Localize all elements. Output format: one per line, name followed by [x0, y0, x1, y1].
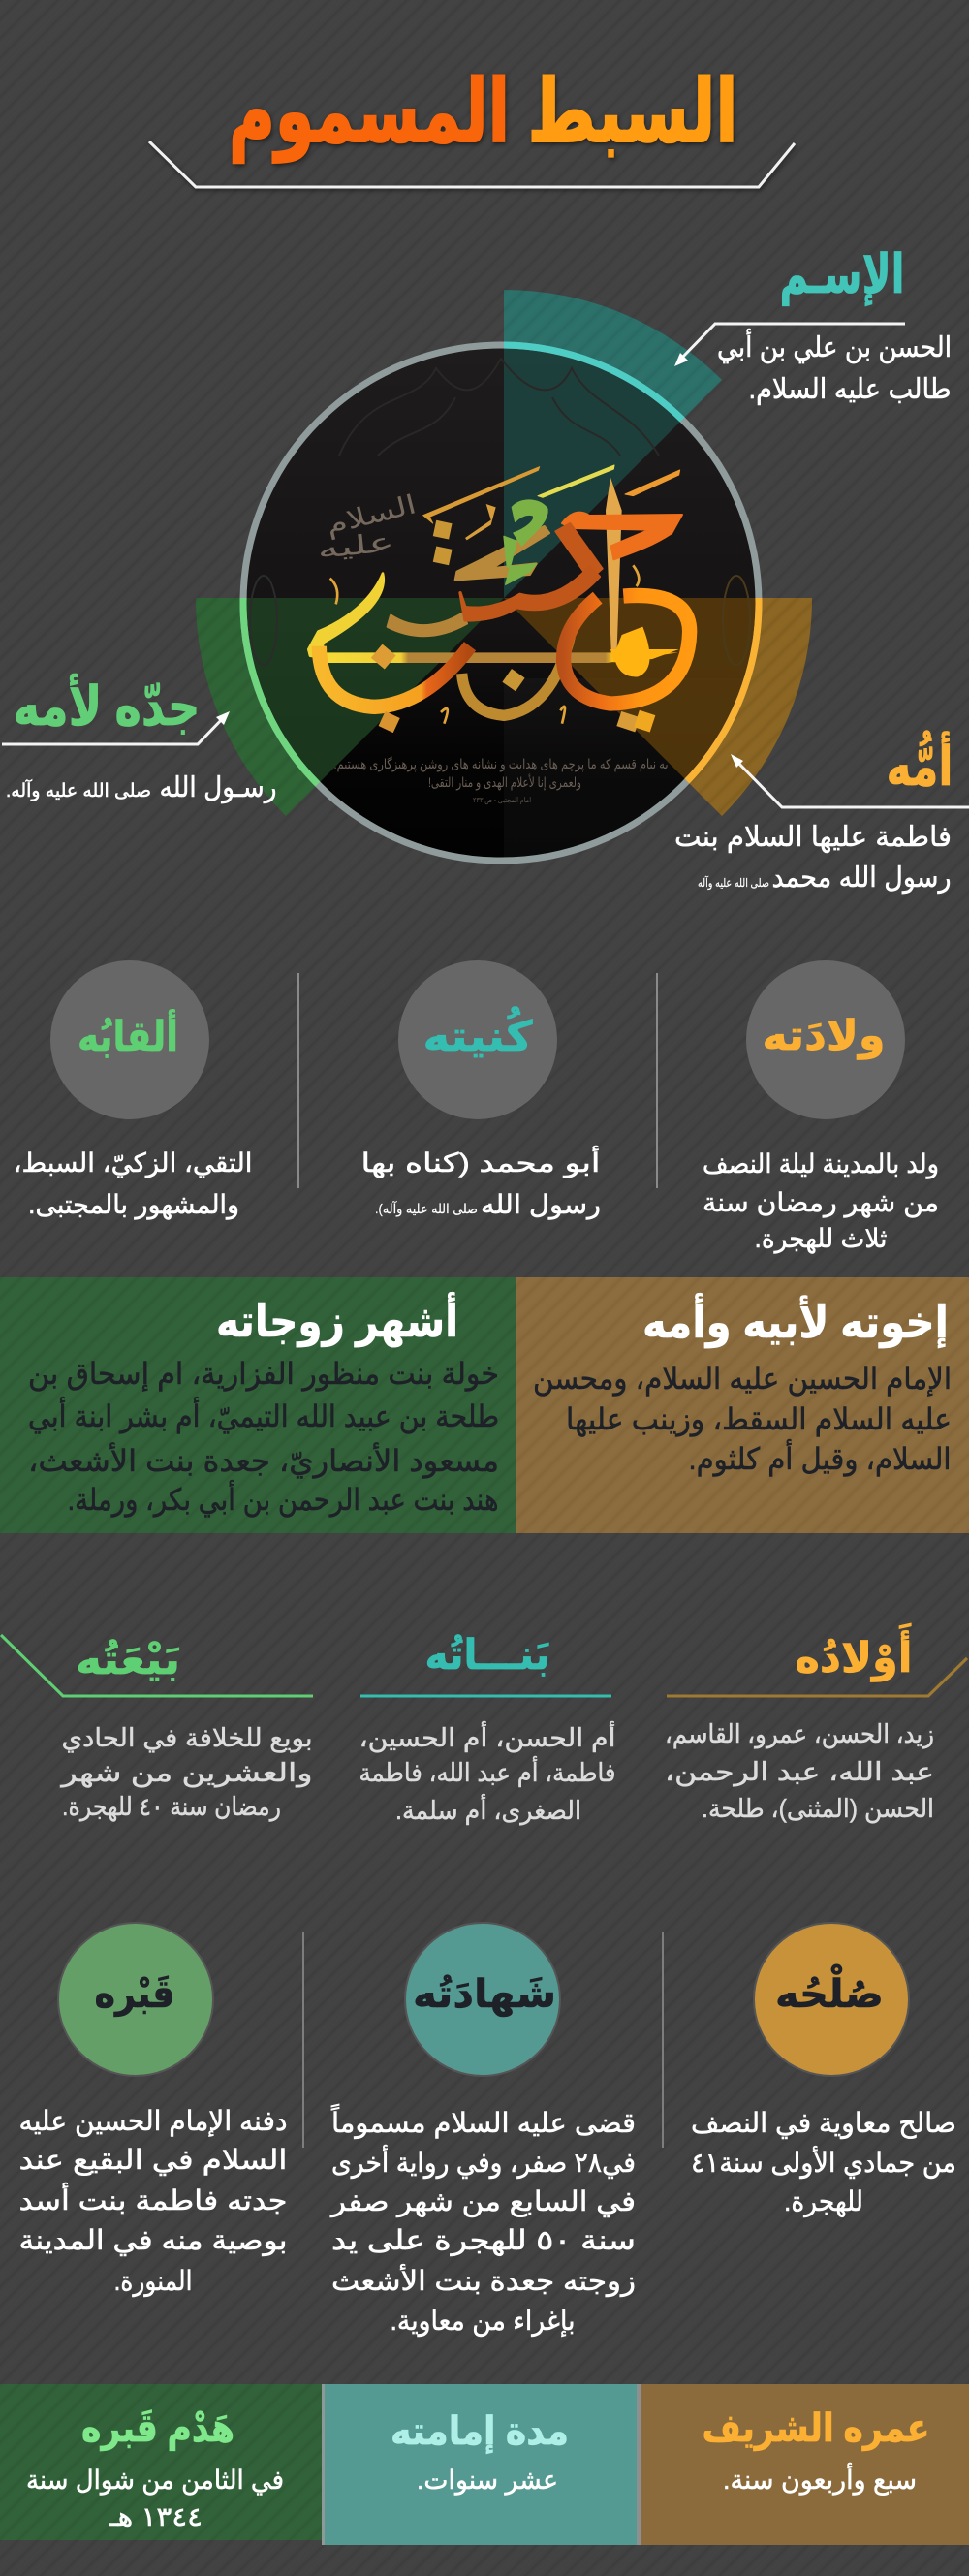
body [533, 1362, 952, 1477]
disc lower inscription [333, 756, 669, 804]
heading: أمُّه [886, 731, 953, 797]
calligraphy: حسن مجتبى [308, 465, 690, 733]
ring green arc [240, 598, 320, 787]
calligraphy small inscription [316, 489, 420, 564]
disc lower inscription: به نیام قسم که ما پرچم های هدایت و نشانه های روشن پرهیزگاری هستیم. [333, 756, 669, 772]
body: في الثامن من شوال سنة [26, 2466, 284, 2496]
panel: siblings [516, 1277, 969, 1533]
disc lower inscription: ولعمری إنا لأعلام الهدى و منار التقى! [428, 773, 581, 791]
titles column [14, 960, 252, 1220]
body: دفنه الإمام الحسين عليه [19, 2106, 287, 2137]
heading: جدّه لأمه [14, 673, 200, 737]
body: التقي، الزكيّ، السبط، [14, 1148, 252, 1178]
body: فاطمة عليها السلام بنت [674, 822, 952, 853]
bracket [1, 1635, 313, 1696]
body: والمشهور بالمجتبى. [28, 1190, 239, 1220]
body: أبو محمد (كناه بها [360, 1145, 601, 1178]
body: ١٣٤٤ هـ [109, 2502, 203, 2531]
body: عبد الله، عبد الرحمن، [665, 1757, 934, 1787]
ring teal arc [504, 341, 684, 423]
green sector [196, 598, 504, 816]
body: أم الحسن، أم الحسين، [359, 1720, 616, 1753]
bracket [667, 1658, 967, 1696]
callout: maternal grandfather [2, 673, 277, 803]
children column [665, 1622, 967, 1824]
body: في السابع من شهر صفر [329, 2186, 636, 2217]
body: السلام في البقيع عند [19, 2145, 287, 2176]
body: الحسن (المثنى)، طلحة. [702, 1794, 934, 1824]
bracket [360, 1694, 611, 1698]
title [229, 64, 738, 163]
body: بوصية منه في المدينة [19, 2225, 287, 2256]
arrow [2, 711, 230, 744]
heading: مدة إمامته [391, 2410, 569, 2454]
body: الصغرى، أم سلمة. [395, 1793, 581, 1826]
body [359, 1720, 616, 1826]
heading: ألقابُه [78, 1009, 178, 1060]
daughters column [359, 1632, 616, 1826]
grey circle [398, 960, 557, 1119]
info row: children, daughters, allegiance [1, 1622, 967, 1826]
body [28, 1357, 499, 1518]
birth column [703, 960, 939, 1254]
disc tints [196, 290, 812, 872]
body: خولة بنت منظور الفزارية، ام إسحاق بن [28, 1357, 499, 1392]
body: صلى الله عليه وآله). [375, 1201, 478, 1217]
body: في٢٨ صفر، وفي رواية أخرى [331, 2144, 636, 2179]
body [703, 1149, 939, 1254]
body: رسول الله محمد [771, 863, 952, 894]
body: جدته فاطمة بنت أسد [19, 2182, 287, 2215]
heading: بَنـــاتُه [424, 1632, 550, 1679]
divider [656, 973, 658, 1188]
body: طلحة بن عبيد الله التيميّ، أم بشر ابنة أبي [28, 1397, 499, 1434]
disc lower inscription: امام المجتبى - ص ٢٣٣ [473, 796, 531, 804]
body: الإمام الحسين عليه السلام، ومحسن [533, 1362, 952, 1397]
info row: birth, kunya, titles [14, 960, 939, 1254]
heading: أَوْلادُه [795, 1622, 913, 1682]
callout: mother [674, 731, 969, 894]
portrait medallion [196, 290, 812, 872]
body [14, 1148, 252, 1220]
heading: أشهر زوجاته [216, 1292, 458, 1347]
title word: orange: السبط [527, 64, 738, 161]
body [360, 1145, 601, 1220]
body: بإغراء من معاوية. [390, 2306, 576, 2337]
body [674, 822, 952, 894]
medallion ring [243, 345, 759, 861]
body: رسـول الله [159, 772, 277, 803]
body: سبع وأربعون سنة. [723, 2462, 917, 2496]
body [26, 2466, 284, 2531]
body: قضى عليه السلام مسموماً [331, 2103, 636, 2139]
body: المنورة. [114, 2266, 192, 2297]
arrow [731, 754, 969, 807]
callout: name [674, 243, 952, 405]
panel: imamate duration [322, 2384, 637, 2545]
body [691, 2108, 956, 2217]
calligraphy small inscription: عليه [316, 527, 395, 564]
body: زوجته جعدة بنت الأشعث [331, 2263, 636, 2297]
body [717, 328, 952, 405]
body [665, 1719, 934, 1824]
grave column [19, 1923, 287, 2297]
body [6, 772, 277, 803]
martyrdom column [329, 1923, 636, 2337]
heading: هَدْم قَبره [81, 2407, 234, 2451]
heading: عمره الشريف [702, 2407, 930, 2451]
sector stripes [196, 290, 812, 816]
heading: ولادَته [762, 1013, 886, 1060]
body: للهجرة. [784, 2186, 863, 2217]
body: من شهر رمضان سنة [703, 1188, 939, 1218]
body: مسعود الأنصاريّ، جعدة بنت الأشعث، [28, 1442, 499, 1479]
body: والعشرين من شهر [59, 1758, 313, 1788]
body: ثلاث للهجرة. [754, 1224, 888, 1254]
body: رمضان سنة ٤٠ للهجرة. [62, 1792, 281, 1822]
peace column [691, 1923, 956, 2217]
body: رسول الله [481, 1190, 601, 1220]
grey circle [50, 960, 209, 1119]
body: صالح معاوية في النصف [691, 2108, 956, 2139]
panel: grave demolition [0, 2384, 322, 2540]
body: فاطمة، أم عبد الله، فاطمة [359, 1755, 616, 1787]
panel: age [637, 2384, 969, 2545]
body: عشر سنوات. [417, 2466, 558, 2496]
heading: شَهادَتُه [413, 1973, 556, 2017]
kunya column [360, 960, 601, 1220]
body: عليه السلام السقط، وزينب عليها [566, 1402, 952, 1437]
body: هند بنت عبد الرحمن بن أبي بكر، ورملة. [68, 1480, 498, 1518]
body [19, 2106, 287, 2297]
info row: peace, martyrdom, grave [19, 1923, 956, 2337]
heading: الإسـم [779, 243, 905, 306]
body: زيد، الحسن، عمرو، القاسم، [665, 1719, 934, 1749]
body: ولد بالمدينة ليلة النصف [703, 1149, 939, 1179]
heading: بَيْعَتُه [76, 1637, 180, 1683]
orange sector [504, 598, 812, 816]
body: الحسن بن علي بن أبي [717, 328, 952, 364]
divider [662, 1932, 664, 2148]
heading: كُنيته [422, 1007, 533, 1060]
ring orange arc [684, 598, 762, 783]
dark disc [244, 346, 758, 860]
body: صلى الله عليه وآله [698, 875, 769, 891]
body [59, 1723, 313, 1822]
divider [297, 973, 299, 1188]
allegiance column [1, 1635, 313, 1822]
teal circle [405, 1923, 560, 2076]
body: صلى الله عليه وآله. [6, 778, 151, 801]
teal sector [504, 290, 722, 598]
body: السلام، وقيل أم كلثوم. [688, 1439, 952, 1477]
heading: صُلْحُه [775, 1964, 884, 2016]
body: بويع للخلافة في الحادي [62, 1723, 312, 1753]
panel: wives [0, 1277, 516, 1533]
body: من جمادي الأولى سنة٤١ [691, 2145, 956, 2179]
grey circle [746, 960, 905, 1119]
arrow [674, 324, 905, 366]
title bracket [149, 141, 795, 187]
calligraphy small inscription: السلام [323, 489, 420, 540]
body [329, 2103, 636, 2337]
green circle [58, 1923, 213, 2076]
body: طالب عليه السلام. [748, 374, 952, 405]
body: سنة ٥٠ للهجرة على يد [331, 2225, 636, 2256]
divider [302, 1932, 304, 2148]
title word: deep orange: المسموم [229, 64, 510, 163]
orange circle [754, 1923, 909, 2076]
heading: قَبْره [95, 1973, 174, 2017]
